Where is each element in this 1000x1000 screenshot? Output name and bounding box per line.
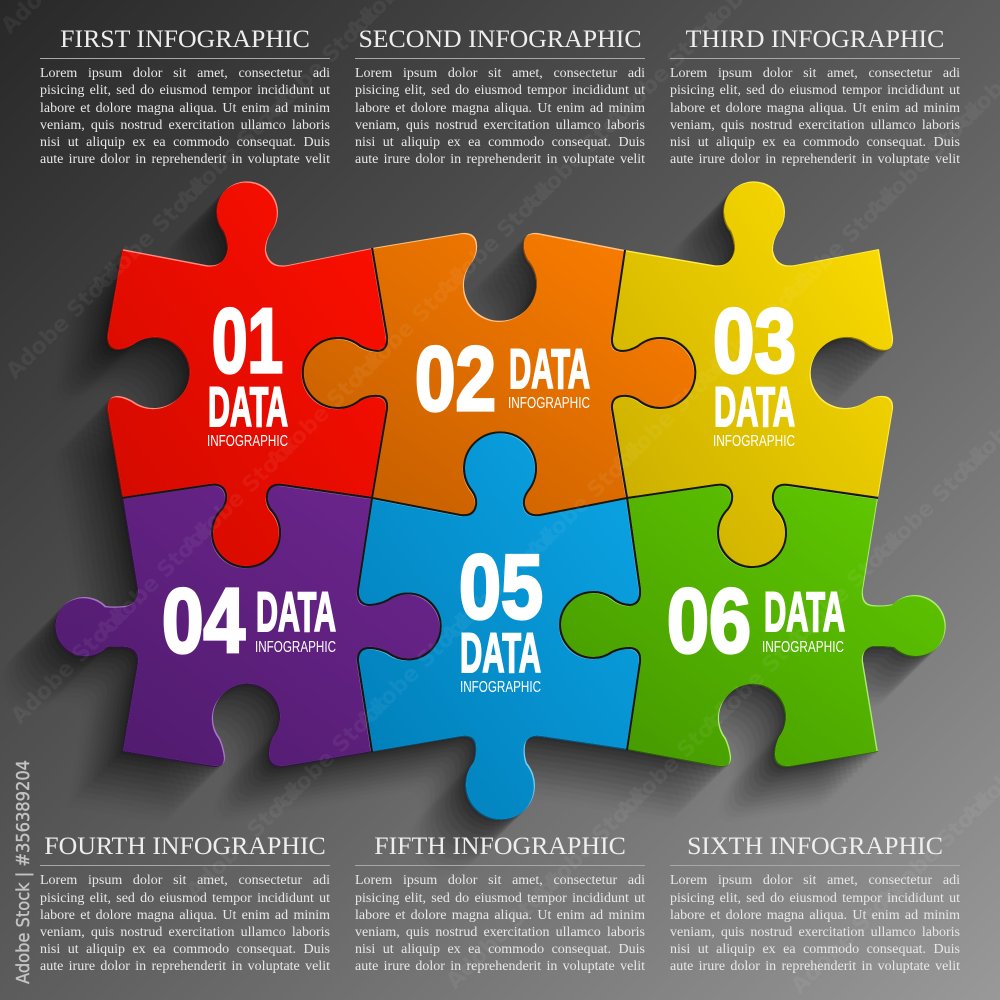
puzzle piece 01 red [106, 180, 388, 568]
label 05: 05 [459, 537, 543, 638]
text block: second [355, 66, 645, 167]
text block: fourth: pisicing elit, sed do eiusmod tempor incididunt ut [40, 891, 330, 906]
text block: fifth: pisicing elit, sed do eiusmod tempor incididunt ut [355, 891, 645, 906]
watermark overlay: Adobe Stock [527, 781, 655, 909]
text block: third [670, 66, 960, 167]
puzzle piece 05 blue [357, 431, 641, 821]
text block: fifth: Lorem ipsum dolor sit amet, consectetur adi [355, 873, 645, 888]
heading: first: FIRST INFOGRAPHIC [60, 24, 310, 53]
watermark overlay: Adobe Stock [172, 86, 300, 214]
text block: first: labore et dolore magna aliqua. Ut enim ad minim [40, 101, 330, 116]
watermark overlay: Adobe Stock [607, 351, 735, 479]
text block: second: aute irure dolor in reprehenderit in voluptate velit [355, 152, 645, 167]
watermark overlay: Adobe Stock [182, 776, 310, 904]
label 01: 01 [212, 291, 283, 392]
label 06: DATA [764, 580, 845, 643]
text block: third: pisicing elit, sed do eiusmod tempor incididunt ut [670, 83, 960, 98]
panel: sixth infographic [670, 831, 960, 974]
interlocking seams [122, 248, 878, 752]
text block: second: labore et dolore magna aliqua. Ut enim ad minim [355, 101, 645, 116]
label 06 [667, 571, 845, 672]
label 02: DATA [509, 337, 590, 400]
watermark overlay: Adobe Stock [602, 6, 730, 134]
watermark overlay: Adobe Stock [92, 516, 220, 644]
watermark overlay: Adobe Stock [347, 261, 475, 389]
label 01 [207, 291, 288, 450]
watermark overlay: Adobe Stock [267, 691, 395, 819]
text block: sixth: Lorem ipsum dolor sit amet, consectetur adi [670, 873, 960, 888]
text block: fifth: nisi ut aliquip ex ea commodo consequat. Duis [355, 942, 645, 957]
watermark overlay: Adobe Stock [787, 871, 915, 999]
panel: third infographic [670, 24, 960, 167]
text block: third: nisi ut aliquip ex ea commodo consequat. Duis [670, 135, 960, 150]
watermark overlay: Adobe Stock [177, 431, 305, 559]
watermark overlay: Adobe Stock [517, 91, 645, 219]
label 03 [713, 291, 796, 450]
watermark overlay: Adobe Stock [2, 256, 130, 384]
text block: fourth [40, 873, 330, 974]
text block: sixth: veniam, quis nostrud exercitation ullamco laboris [670, 925, 960, 940]
puzzle piece 06 green [559, 484, 947, 768]
label 02 [415, 329, 590, 430]
text block: first: aute irure dolor in reprehenderit in voluptate velit [40, 152, 330, 167]
text block: fifth [355, 873, 645, 974]
label 03: INFOGRAPHIC [713, 433, 795, 450]
text block: second: veniam, quis nostrud exercitation ullamco laboris [355, 118, 645, 133]
label 03: 03 [713, 291, 796, 392]
text block: fifth: labore et dolore magna aliqua. Ut enim ad minim [355, 908, 645, 923]
label 05 [459, 537, 543, 696]
watermark overlay: Adobe Stock [522, 436, 650, 564]
label 02: INFOGRAPHIC [508, 395, 590, 412]
watermark overlay: Adobe Stock [352, 606, 480, 734]
label 04: 04 [162, 571, 245, 672]
text block: sixth: aute irure dolor in reprehenderit in voluptate velit [670, 959, 960, 974]
puzzle piece 02 orange [302, 232, 696, 516]
text block: first: Lorem ipsum dolor sit amet, consectetur adi [40, 66, 330, 81]
text block: sixth: labore et dolore magna aliqua. Ut enim ad minim [670, 908, 960, 923]
label 05: INFOGRAPHIC [460, 679, 541, 696]
watermark overlay: Adobe Stock [87, 171, 215, 299]
puzzle graphic [14, 181, 946, 865]
watermark overlay: Adobe Stock [777, 181, 905, 309]
text block: third: veniam, quis nostrud exercitation ullamco laboris [670, 118, 960, 133]
text block: third: labore et dolore magna aliqua. Ut enim ad minim [670, 101, 960, 116]
text block: second: nisi ut aliquip ex ea commodo consequat. Duis [355, 135, 645, 150]
watermark overlay: Adobe Stock [432, 176, 560, 304]
label 06: 06 [667, 571, 751, 672]
watermark overlay: Adobe Stock [257, 1, 385, 129]
label 06: INFOGRAPHIC [762, 639, 844, 656]
label 02: 02 [415, 329, 496, 430]
text block: fifth: veniam, quis nostrud exercitation ullamco laboris [355, 925, 645, 940]
heading: fourth: FOURTH INFOGRAPHIC [44, 831, 326, 860]
panel: fourth infographic [40, 831, 330, 974]
heading: sixth: SIXTH INFOGRAPHIC [687, 831, 943, 860]
heading: third: THIRD INFOGRAPHIC [686, 24, 944, 53]
watermark overlay: Adobe Stock [867, 441, 995, 569]
label 05: DATA [460, 621, 541, 684]
text block: fifth: aute irure dolor in reprehenderit in voluptate velit [355, 959, 645, 974]
text block: fourth: labore et dolore magna aliqua. Ut enim ad minim [40, 908, 330, 923]
text block: first: pisicing elit, sed do eiusmod tempor incididunt ut [40, 83, 330, 98]
text block: sixth: pisicing elit, sed do eiusmod tempor incididunt ut [670, 891, 960, 906]
text block: fourth: aute irure dolor in reprehenderit in voluptate velit [40, 959, 330, 974]
stock id vertical text: Adobe Stock | #356389204 [13, 760, 34, 984]
text block: second: pisicing elit, sed do eiusmod tempor incididunt ut [355, 83, 645, 98]
text block: sixth [670, 873, 960, 974]
watermark overlay: Adobe Stock [442, 866, 570, 994]
text block: fourth: Lorem ipsum dolor sit amet, consectetur adi [40, 873, 330, 888]
text block: second: Lorem ipsum dolor sit amet, consectetur adi [355, 66, 645, 81]
text block: first: veniam, quis nostrud exercitation ullamco laboris [40, 118, 330, 133]
watermark overlay: Adobe Stock [697, 611, 825, 739]
heading: second: SECOND INFOGRAPHIC [358, 24, 642, 53]
watermark overlay: Adobe Stock [872, 786, 1000, 914]
text block: third: aute irure dolor in reprehenderit in voluptate velit [670, 152, 960, 167]
puzzle piece 04 purple [53, 484, 442, 768]
watermark overlay: Adobe Stock [692, 266, 820, 394]
panel: first infographic [40, 24, 330, 167]
text block: third: Lorem ipsum dolor sit amet, consectetur adi [670, 66, 960, 81]
text block: sixth: nisi ut aliquip ex ea commodo consequat. Duis [670, 942, 960, 957]
text block: fourth: nisi ut aliquip ex ea commodo consequat. Duis [40, 942, 330, 957]
label 01: DATA [208, 375, 288, 438]
panel: second infographic [355, 24, 645, 167]
label 04 [162, 571, 336, 672]
label 04: DATA [256, 580, 336, 643]
panel: fifth infographic [355, 831, 645, 974]
watermark overlay: Adobe Stock [862, 96, 990, 224]
text block: first [40, 66, 330, 167]
label 03: DATA [714, 375, 795, 438]
label 04: INFOGRAPHIC [255, 639, 336, 656]
watermark overlay: Adobe Stock [437, 521, 565, 649]
watermark overlay: Adobe Stock [262, 346, 390, 474]
puzzle piece 03 yellow [611, 180, 894, 568]
text block: first: nisi ut aliquip ex ea commodo consequat. Duis [40, 135, 330, 150]
heading: fifth: FIFTH INFOGRAPHIC [374, 831, 626, 860]
text block: fourth: veniam, quis nostrud exercitation ullamco laboris [40, 925, 330, 940]
watermark overlay: Adobe Stock [782, 526, 910, 654]
watermark overlay: Adobe Stock [612, 696, 740, 824]
long diagonal shadow [0, 183, 944, 875]
watermark overlay: Adobe Stock [7, 601, 135, 729]
label 01: INFOGRAPHIC [207, 433, 288, 450]
